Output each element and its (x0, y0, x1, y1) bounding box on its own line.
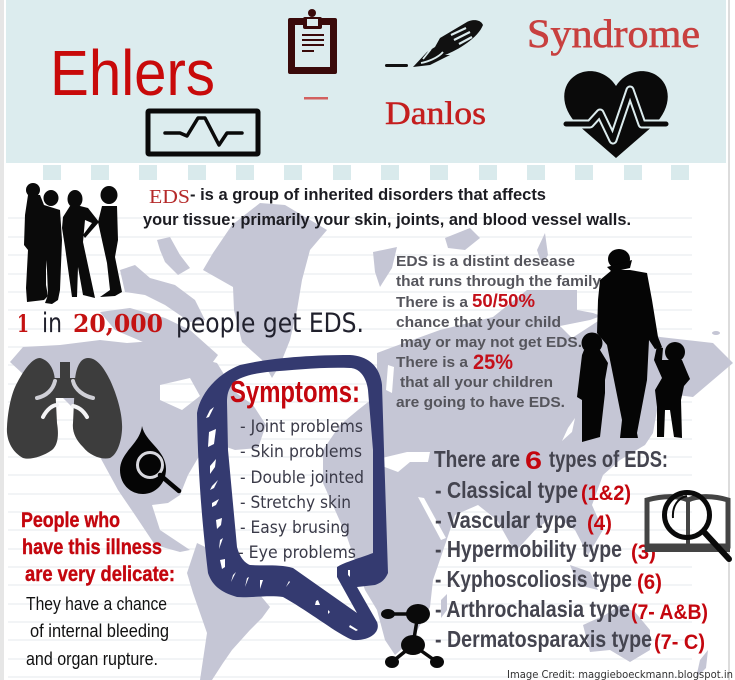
types heading: types of EDS: (549, 446, 668, 472)
icon: adult with two children (577, 249, 690, 442)
symptoms heading: Symptoms: (230, 374, 360, 409)
warning body (26, 594, 169, 669)
title: Syndrome: Syndrome (527, 11, 700, 56)
types heading (434, 446, 668, 475)
symptoms list: - Skin problems (240, 442, 362, 462)
statistic: 1 in 20,000: people get EDS. (176, 308, 364, 339)
map: Baffin and northern Canada (100, 308, 218, 366)
map: Madagascar (441, 594, 447, 618)
warning body: They have a chance (26, 594, 167, 614)
family risk text (396, 253, 602, 411)
warning heading: are very delicate: (25, 563, 175, 586)
symptoms list: - Stretchy skin (240, 493, 351, 513)
family risk text: chance that your child (396, 314, 561, 331)
warning heading: have this illness (22, 536, 162, 559)
symptoms list: - Easy brusing (240, 518, 350, 538)
icon: book with magnifier (645, 492, 730, 559)
family risk text: 25% (473, 351, 513, 374)
types heading: There are (434, 446, 520, 472)
types list: - Classical type (435, 477, 578, 503)
family risk text: may or may not get EDS. (400, 334, 582, 351)
types list: - Hypermobility type (435, 536, 622, 562)
types list: (3) (631, 541, 656, 564)
family risk text: There is a (396, 354, 469, 371)
icon: clipboard (288, 9, 337, 74)
warning body: and organ rupture. (26, 649, 158, 669)
types list: - Arthrochalasia type (435, 596, 630, 622)
definition line 1: - is a group of inherited disorders that affects (190, 185, 546, 204)
map: Africa and Eurasia (323, 290, 733, 655)
intro text (143, 185, 631, 229)
map: Indonesia (570, 565, 598, 590)
types list (435, 477, 708, 654)
family risk text: EDS is a distint desease (396, 253, 575, 270)
icon: heart with pulse (563, 71, 669, 158)
types list: - Dermatosparaxis type (435, 626, 652, 652)
tab strip (43, 165, 689, 180)
symptoms list: - Eye problems (238, 543, 356, 563)
types list: (4) (587, 512, 612, 535)
icon: lungs (7, 358, 122, 459)
map: New Zealand (696, 650, 708, 678)
map: South America (187, 543, 270, 680)
title dash (304, 97, 328, 100)
types list: - Kyphoscoliosis type (435, 566, 632, 592)
warning text (21, 509, 175, 669)
types list: (7- C) (654, 631, 705, 654)
types list: (7- A&B) (631, 601, 708, 624)
types list: - Vascular type (435, 507, 577, 533)
definition line 2: your tissue; primarily your skin, joints, and blood vessel walls. (143, 210, 631, 229)
map: Novaya Zemlya (537, 233, 548, 265)
icon: molecule (381, 604, 444, 668)
family risk text: are going to have EDS. (396, 394, 565, 411)
map: Arctic islands (157, 237, 190, 275)
family risk text: that runs through the family (396, 273, 602, 290)
icon: blood drop with magnifier (120, 426, 179, 494)
family risk text: There is a (396, 294, 469, 311)
map: small Pacific island (712, 331, 720, 335)
map: North America (10, 340, 266, 552)
symptoms list: - Joint problems (240, 417, 363, 437)
symptoms list: - Double jointed (240, 468, 364, 488)
family risk text: that all your children (400, 374, 553, 391)
family risk text: 50/50% (472, 291, 535, 311)
icon: heart monitor box (148, 111, 258, 154)
warning heading (21, 509, 175, 586)
speech bubble (197, 355, 388, 640)
icon: quill pen (385, 20, 483, 67)
map: Greenland (203, 203, 327, 378)
warning body: of internal bleeding (30, 621, 169, 641)
icon: group of four people (24, 183, 122, 304)
title: Danlos: Danlos (385, 96, 486, 132)
world map background (10, 203, 733, 680)
symptoms list (238, 417, 364, 563)
statistic: 1 in 20,000: 20,000 (73, 309, 163, 338)
map: Svalbard (373, 247, 397, 287)
map: Arctic archipelago (445, 228, 480, 250)
statistic: 1 in 20,000 (17, 308, 364, 339)
map: Australia (583, 605, 650, 662)
types list: (6) (637, 571, 662, 594)
warning heading: People who (21, 509, 120, 532)
statistic: 1 in 20,000: 1 (17, 309, 29, 338)
title: Ehlers: Ehlers (50, 37, 215, 109)
types list: (1&2) (581, 482, 631, 505)
types heading: 6 (525, 447, 542, 475)
EDS label: EDS (149, 186, 190, 208)
statistic: 1 in 20,000: in (42, 308, 62, 339)
map: Canadian islands (120, 265, 205, 322)
